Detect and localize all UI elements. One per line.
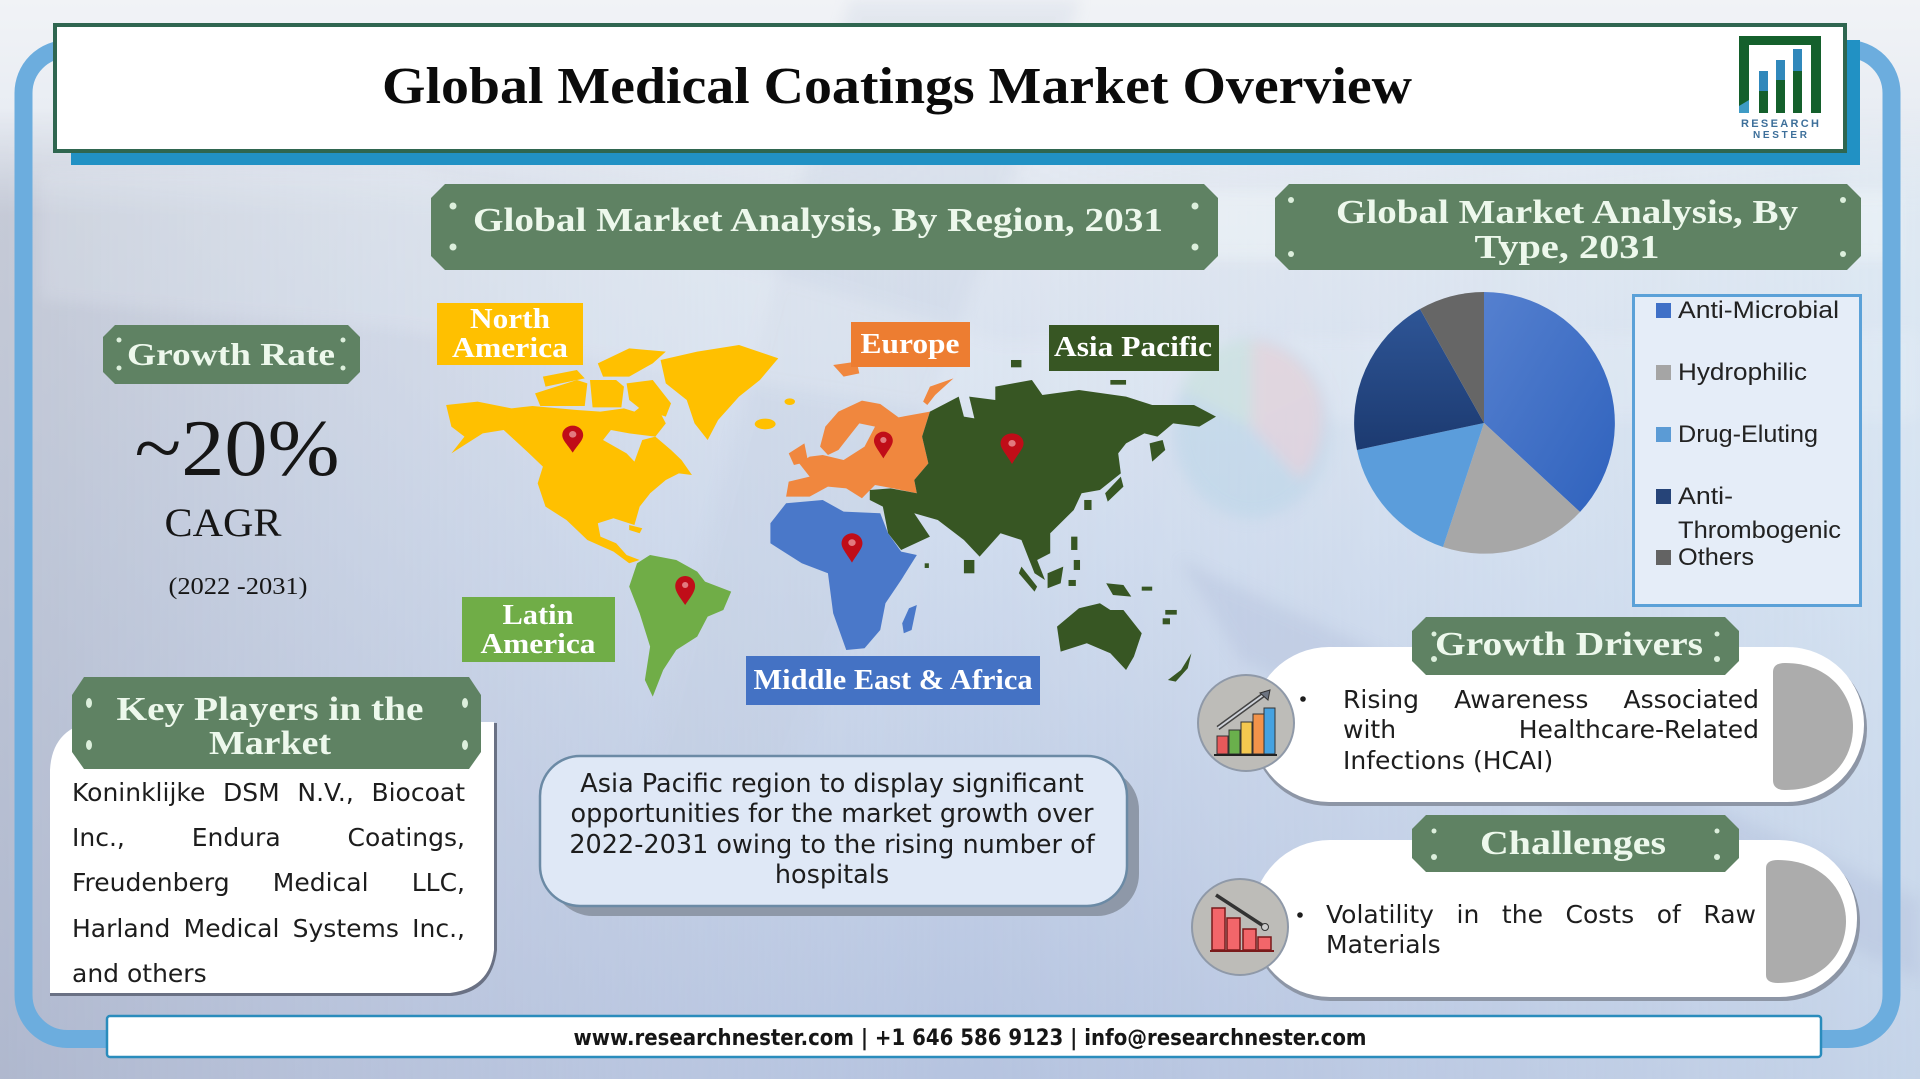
panel: challenges bbox=[1192, 815, 1860, 1001]
label: Middle East and Africa: Middle East & Africa bbox=[754, 665, 1032, 696]
growth rate stat bbox=[134, 405, 340, 600]
label: Latin America: Latin bbox=[502, 600, 574, 631]
heading: challenges: Challenges bbox=[1480, 825, 1666, 862]
legend: Anti-Microbial bbox=[1678, 297, 1839, 324]
label: Asia Pacific bbox=[1049, 325, 1219, 371]
legend: Anti- bbox=[1678, 483, 1733, 510]
challenges text: Materials bbox=[1326, 930, 1441, 959]
challenges text: Volatility in the Costs of Raw bbox=[1326, 900, 1756, 929]
region: Europe bbox=[786, 362, 953, 498]
footer contact bar bbox=[107, 1016, 1821, 1057]
callout: Asia Pacific insight bbox=[540, 756, 1139, 916]
growth rate stat: (2022 -2031) bbox=[168, 574, 308, 600]
label: Asia Pacific: Asia Pacific bbox=[1054, 332, 1212, 363]
growth drivers text: Infections (HCAI) bbox=[1343, 746, 1553, 775]
growth drivers text bbox=[1300, 685, 1759, 785]
callout: Asia Pacific insight: hospitals bbox=[775, 860, 889, 890]
label: North America: America bbox=[452, 333, 568, 364]
heading: market analysis by type bbox=[1275, 184, 1861, 270]
pie chart: market by type bbox=[1354, 292, 1615, 554]
heading: market analysis by region bbox=[431, 184, 1218, 270]
title: Global Medical Coatings Market Overview bbox=[382, 58, 1412, 115]
label: Latin America: America bbox=[480, 629, 596, 660]
label: North America: North bbox=[470, 304, 550, 335]
panel: growth drivers bbox=[1198, 617, 1867, 806]
growth drivers text: with Healthcare-Related bbox=[1343, 715, 1759, 744]
key players list bbox=[72, 770, 465, 996]
label: North America bbox=[437, 303, 583, 365]
legend: Drug-Eluting bbox=[1678, 421, 1818, 448]
key players list: Freudenberg Medical LLC, bbox=[72, 868, 465, 897]
growth drivers text: Rising Awareness Associated bbox=[1343, 685, 1759, 714]
gray half disc bbox=[1773, 663, 1853, 790]
callout: Asia Pacific insight: 2022-2031 owing to the rising number of bbox=[569, 830, 1095, 860]
heading: challenges bbox=[1412, 815, 1739, 872]
label: Latin America bbox=[462, 597, 615, 662]
logo: Research Nester bbox=[1739, 36, 1821, 141]
key players list: Harland Medical Systems Inc., bbox=[72, 914, 465, 943]
heading: growth drivers bbox=[1412, 617, 1739, 675]
region: Asia Pacific bbox=[870, 360, 1216, 682]
legend bbox=[1634, 296, 1860, 606]
region: Latin America bbox=[629, 555, 731, 697]
heading: key players: Market bbox=[209, 725, 332, 762]
callout: Asia Pacific insight: Asia Pacific region to display significant bbox=[580, 769, 1084, 799]
challenges text bbox=[1297, 900, 1756, 970]
icon: rising bar chart bbox=[1198, 675, 1294, 771]
key players list: Inc., Endura Coatings, bbox=[72, 823, 465, 852]
callout: Asia Pacific insight: opportunities for the market growth over bbox=[570, 799, 1094, 829]
logo: Research Nester: RESEARCH bbox=[1741, 118, 1819, 130]
growth rate stat: CAGR bbox=[164, 500, 282, 545]
legend: Thrombogenic bbox=[1678, 517, 1841, 544]
label: Middle East and Africa bbox=[746, 656, 1040, 705]
legend: Others bbox=[1678, 544, 1754, 571]
heading: market analysis by region: Global Market Analysis, By Region, 2031 bbox=[473, 202, 1163, 239]
heading: growth rate bbox=[103, 325, 360, 384]
footer contact bar: www.researchnester.com | +1 646 586 9123 | info@researchnester.com bbox=[574, 1026, 1366, 1051]
heading: growth rate: Growth Rate bbox=[127, 336, 335, 372]
heading: market analysis by type: Type, 2031 bbox=[1474, 229, 1660, 266]
region: North America bbox=[446, 345, 795, 563]
growth rate stat: ~20% bbox=[134, 405, 340, 493]
legend: Hydrophilic bbox=[1678, 359, 1807, 386]
gray half disc bbox=[1766, 860, 1846, 983]
map pins bbox=[562, 426, 1024, 605]
heading: market analysis by type: Global Market Analysis, By bbox=[1336, 194, 1798, 231]
label: Europe bbox=[851, 322, 970, 367]
icon: falling bar chart bbox=[1192, 879, 1288, 975]
heading: key players: Key Players in the bbox=[116, 691, 424, 728]
key players list: and others bbox=[72, 959, 207, 988]
panel: key players bbox=[50, 677, 497, 996]
world map bbox=[446, 345, 1216, 697]
key players list: Koninklijke DSM N.V., Biocoat bbox=[72, 778, 465, 807]
label: Europe: Europe bbox=[860, 329, 960, 360]
title banner bbox=[55, 25, 1860, 165]
heading: key players bbox=[72, 677, 481, 769]
logo: Research Nester: NESTER bbox=[1753, 130, 1808, 141]
heading: growth drivers: Growth Drivers bbox=[1435, 626, 1703, 663]
region: Middle East and Africa bbox=[770, 500, 917, 650]
